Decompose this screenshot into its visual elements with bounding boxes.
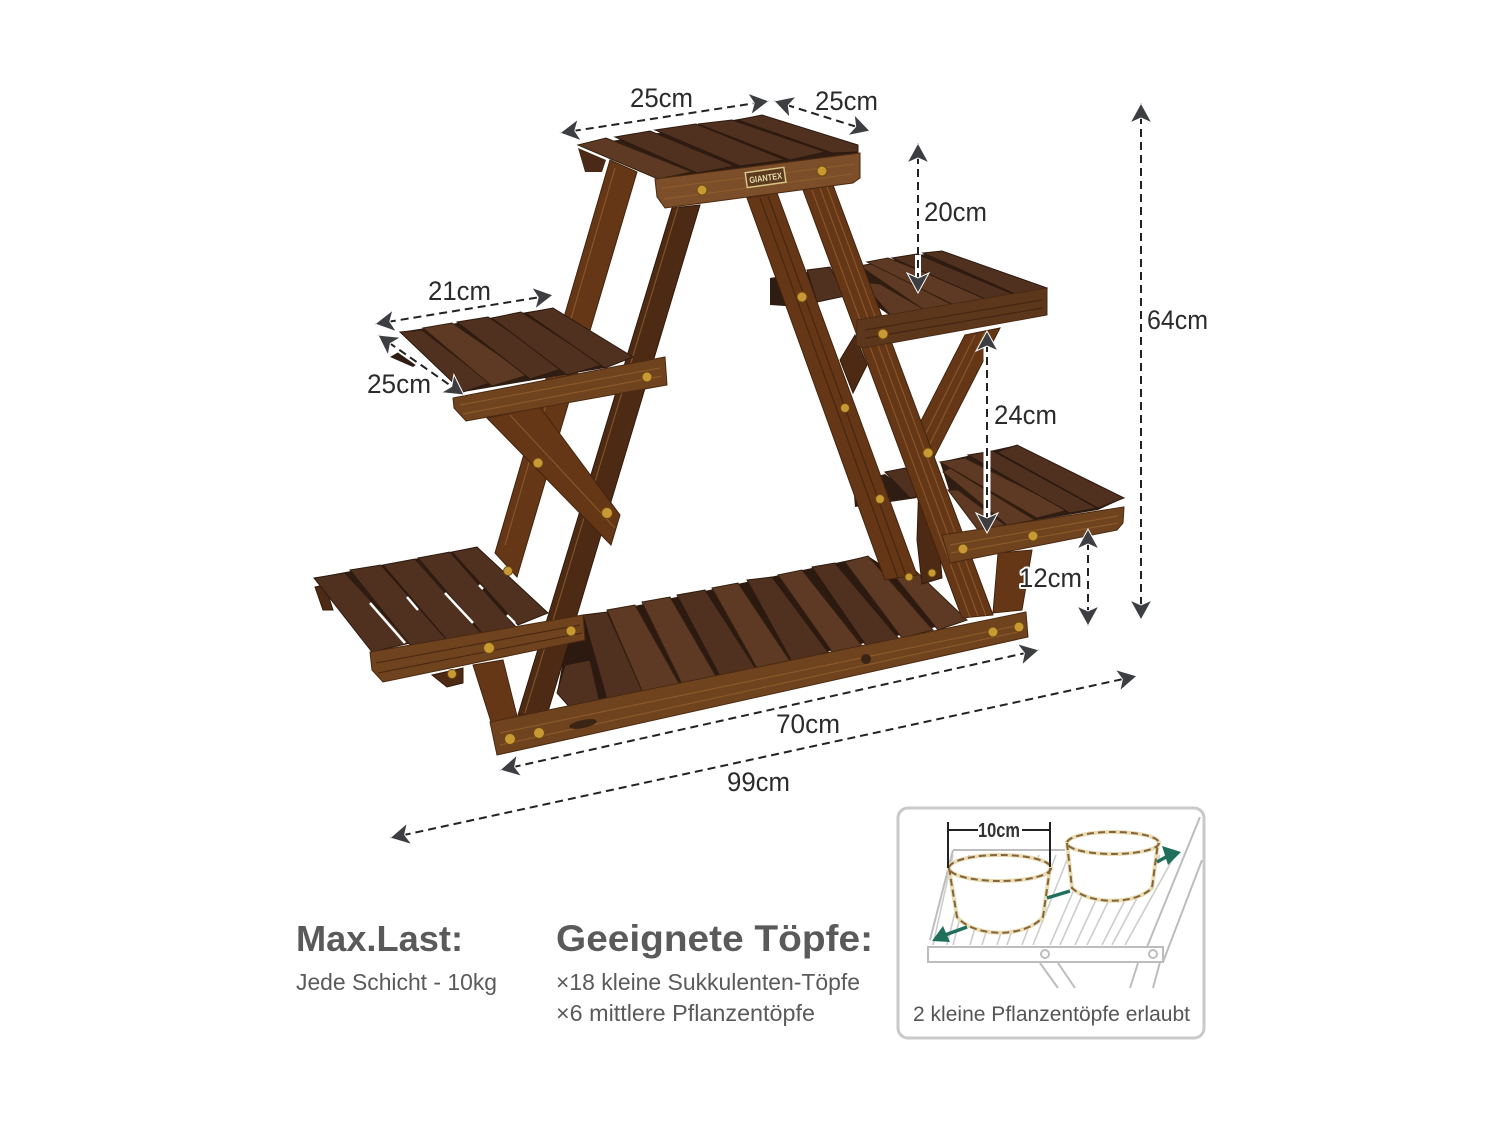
dimension: height 12cm <box>1019 529 1088 626</box>
text block: suitable pots: ×18 kleine Sukkulenten-Töpfe <box>556 969 860 995</box>
dimension: left depth 25cm <box>367 335 464 399</box>
dimension: total length 99cm: 99cm <box>727 767 790 797</box>
dimension: top depth 25cm: 25cm <box>815 86 878 116</box>
right shelf rear supports <box>770 267 925 507</box>
brass screws <box>448 166 1038 744</box>
brand plate <box>745 167 786 188</box>
dimension: total height 64cm: 64cm <box>1147 305 1208 335</box>
text block: suitable pots: Geeignete Töpfe: <box>556 918 873 959</box>
dimension: height 20cm: 20cm <box>924 197 987 227</box>
brand plate: GIANTEX <box>749 171 783 185</box>
dimension: inner length 70cm <box>500 650 1039 770</box>
text block: max load: Max.Last: <box>296 918 463 959</box>
pot outline 2 <box>1067 832 1159 901</box>
right lower shelf front board <box>942 507 1124 563</box>
left middle shelf <box>390 308 667 421</box>
text block: max load: Jede Schicht - 10kg <box>296 969 497 995</box>
dimension: top width 25cm <box>560 83 769 133</box>
dimension: height 12cm: 12cm <box>1019 563 1082 593</box>
dimension: shelf width 21cm: 21cm <box>428 276 491 306</box>
caption: 2 kleine Pflanzentöpfe erlaubt <box>913 1003 1190 1026</box>
left legs <box>315 160 700 715</box>
right upper shelf slats <box>860 251 1047 317</box>
dimension: top depth 25cm <box>774 86 878 131</box>
text block: suitable pots <box>556 918 873 1026</box>
wooden plant stand <box>314 115 1124 755</box>
bottom front board <box>490 612 1028 755</box>
green spacing arrows <box>932 846 1181 942</box>
10cm measure: 10cm <box>978 820 1020 842</box>
right legs and brace <box>747 185 1032 618</box>
bottom shelf slats <box>557 556 967 711</box>
text block: max load <box>296 918 497 995</box>
text block: suitable pots: ×6 mittlere Pflanzentöpfe <box>556 1000 815 1026</box>
right upper shelf front board <box>856 288 1047 348</box>
dimension: height 24cm: 24cm <box>994 400 1057 430</box>
dimension: left depth 25cm: 25cm <box>367 369 431 399</box>
10cm measure <box>948 820 1050 868</box>
dimension: total length 99cm <box>390 676 1137 838</box>
right lower shelf slats <box>940 445 1124 530</box>
shelf line drawing <box>928 817 1202 988</box>
dimension: top width 25cm: 25cm <box>630 83 693 113</box>
panel: pot size illustration <box>898 808 1204 1038</box>
lower left shelf <box>314 547 585 682</box>
top shelf <box>578 115 860 208</box>
left short leg <box>473 660 517 725</box>
pot outline 1 <box>949 855 1051 933</box>
dimension: inner length 70cm: 70cm <box>776 709 840 739</box>
dimension: shelf width 21cm <box>375 276 553 324</box>
